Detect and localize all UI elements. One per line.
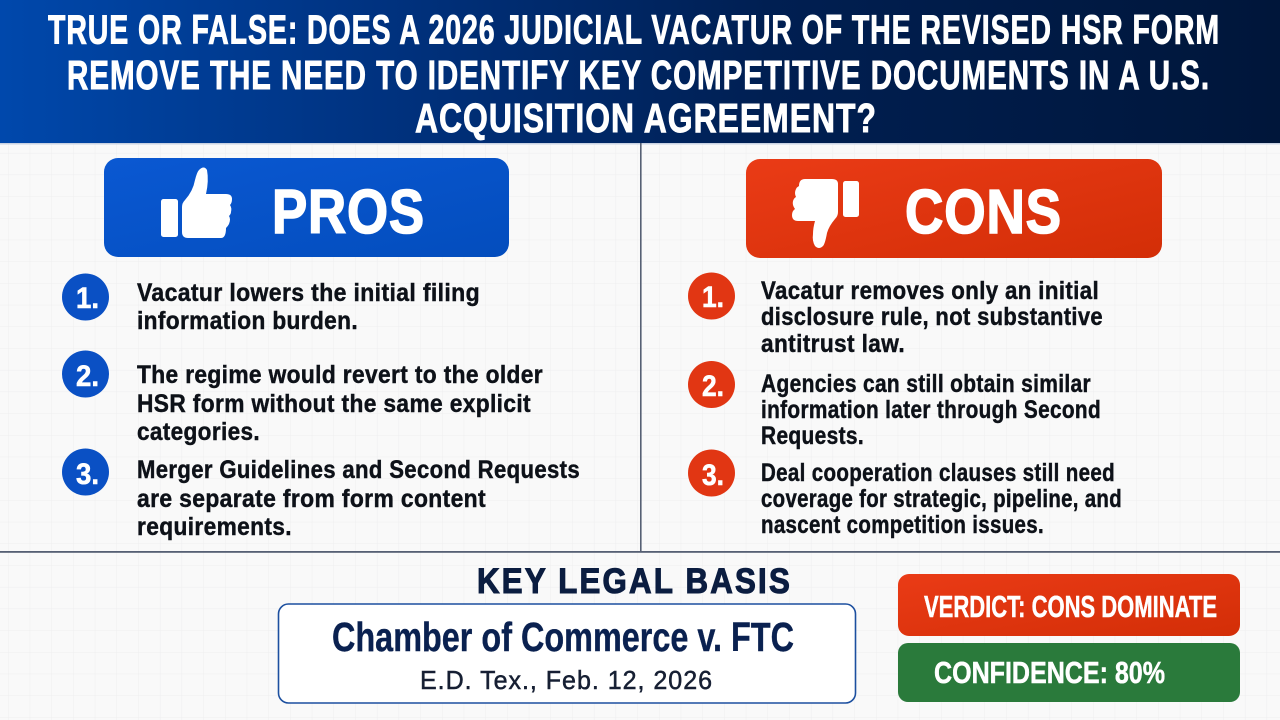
heading: key legal basis: KEY LEGAL BASIS [477,562,792,601]
panel: cons [688,159,1162,539]
pro 3: are separate from form content [137,485,486,513]
con 2: information later through Second [761,396,1101,424]
title [48,6,1220,141]
icon: thumbs up [161,168,232,238]
pro 1 [62,274,480,335]
pro 3: requirements. [137,513,292,541]
con 2: Requests. [761,422,864,450]
icon: thumbs down [792,179,859,248]
pro 2: HSR form without the same explicit [137,390,531,418]
con 3: Deal cooperation clauses still need [761,459,1115,487]
pro 2: categories. [137,418,260,446]
pro 2: The regime would revert to the older [137,361,543,389]
con 1 [688,272,1103,358]
con 2: 2. [702,370,724,403]
verdict badge [898,574,1240,636]
con 1: disclosure rule, not substantive [761,303,1103,331]
con 2: Agencies can still obtain similar [761,370,1091,398]
pro 2 [62,350,543,446]
case citation box: E.D. Tex., Feb. 12, 2026 [420,665,713,695]
cons header [746,159,1162,258]
con 2 [688,361,1101,450]
header banner [0,0,1280,143]
con 3: coverage for strategic, pipeline, and [761,485,1122,513]
pro 2: 2. [76,360,99,393]
title: ACQUISITION AGREEMENT? [415,95,877,141]
pro 1: 1. [76,282,99,315]
confidence badge: CONFIDENCE: 80% [934,655,1165,690]
cons label: CONS [905,178,1062,247]
confidence badge [898,643,1240,702]
pros label: PROS [272,178,425,247]
con 1: Vacatur removes only an initial [761,277,1099,305]
pros header [104,158,509,257]
con 1: 1. [702,281,724,314]
panel: pros [62,158,580,541]
case citation box: Chamber of Commerce v. FTC [332,614,794,660]
con 1: antitrust law. [761,330,905,358]
pro 3: Merger Guidelines and Second Requests [137,456,580,484]
pro 3: 3. [76,458,99,491]
con 3: nascent competition issues. [761,511,1044,539]
con 3 [688,450,1122,539]
pro 1: Vacatur lowers the initial filing [137,279,480,307]
con 3: 3. [702,459,724,492]
pro 3 [62,448,580,541]
case citation box [278,604,856,703]
pro 1: information burden. [137,307,358,335]
